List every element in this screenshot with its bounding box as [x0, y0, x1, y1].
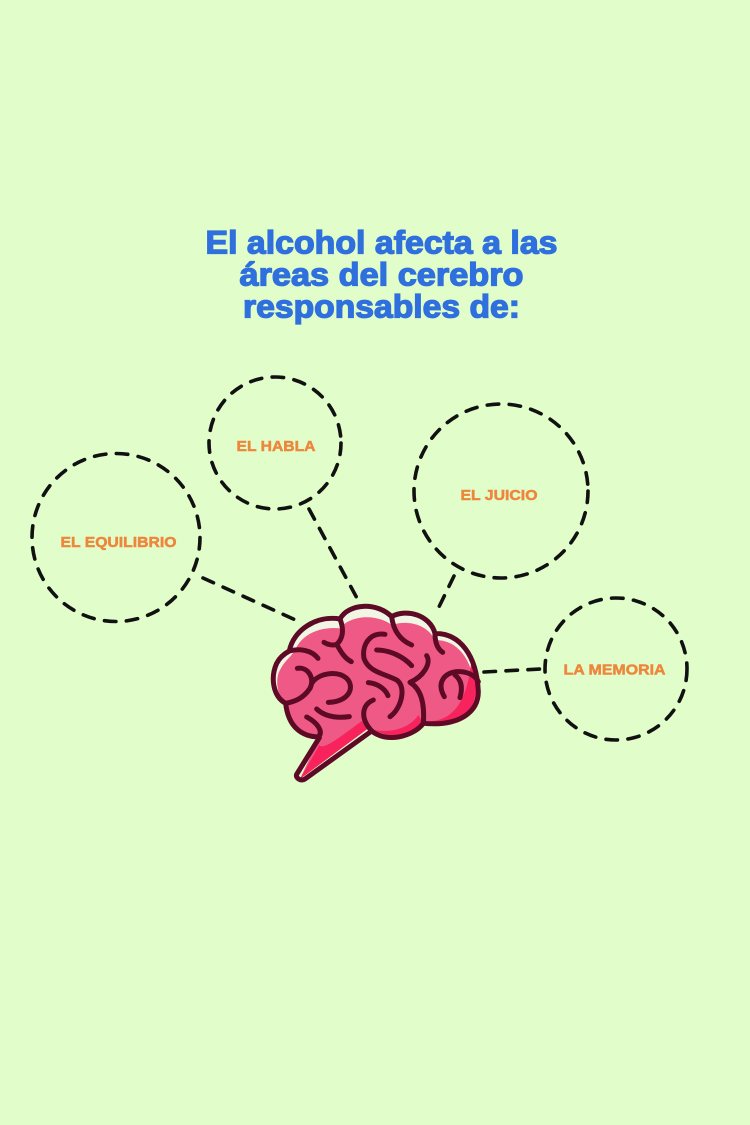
circle: la memoria	[545, 598, 687, 740]
circle: el equilibrio	[32, 454, 200, 622]
circle: el juicio	[414, 404, 588, 578]
title: responsables de:	[243, 288, 520, 324]
circle: el habla	[209, 377, 341, 509]
title: El alcohol afecta a las	[206, 224, 558, 260]
circle: el juicio: EL JUICIO	[460, 487, 538, 504]
title	[206, 224, 558, 324]
title: áreas del cerebro	[240, 256, 524, 292]
circle: la memoria: LA MEMORIA	[564, 662, 666, 678]
connector lines	[203, 509, 540, 672]
brain folds	[337, 619, 351, 662]
circle: el habla: EL HABLA	[236, 438, 316, 455]
brain outline	[273, 606, 478, 780]
circle: el equilibrio: EL EQUILIBRIO	[60, 534, 177, 551]
icon: brain	[273, 606, 478, 780]
